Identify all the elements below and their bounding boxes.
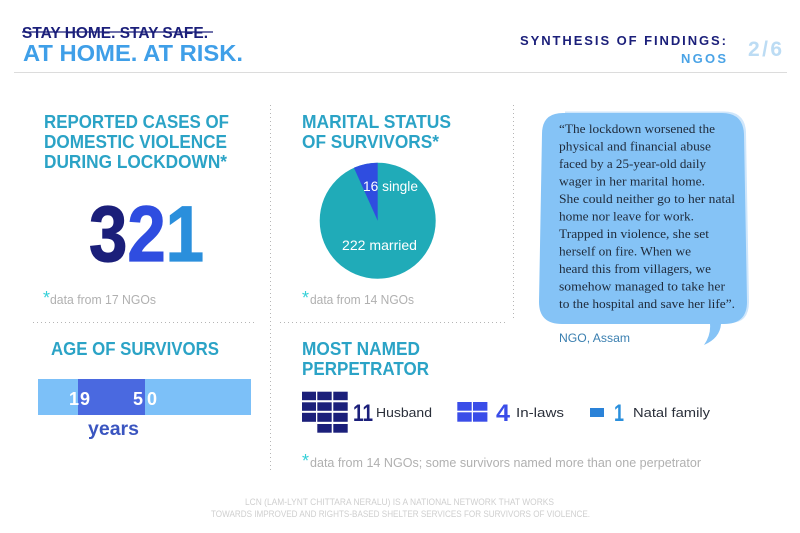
quote text: She could neither go to her natal <box>559 191 735 206</box>
footnote <box>43 288 156 308</box>
age range bar: 19 <box>69 389 90 409</box>
age range bar <box>38 379 251 415</box>
icon: natal family block <box>590 408 604 417</box>
speech bubble <box>539 112 749 345</box>
heading: reported cases <box>44 111 229 172</box>
panel: reported cases <box>43 111 229 308</box>
title: STAY HOME. STAY SAFE. <box>22 25 208 42</box>
footnote: data from 17 NGOs <box>50 292 156 307</box>
quote attribution: NGO, Assam <box>559 331 630 345</box>
panel: age of survivors <box>38 338 251 440</box>
header: synthesis of findings: SYNTHESIS OF FINDINGS: <box>520 33 726 48</box>
stat: 4 in-laws: 4 <box>496 400 511 427</box>
quote text: somehow managed to take her <box>559 278 726 294</box>
footer text: TOWARDS IMPROVED AND RIGHTS-BASED SHELTER SERVICES FOR SURVIVORS OF VIOLENCE. <box>211 509 590 519</box>
heading: most named perpetrator: PERPETRATOR <box>302 358 429 379</box>
footnote: * <box>302 451 309 471</box>
stat: 4 in-laws: In-laws <box>516 405 565 420</box>
quote text: to the hospital and save her life”. <box>559 296 735 311</box>
quote text: heard this from villagers, we <box>559 261 711 276</box>
pie chart: 222 married <box>342 237 417 253</box>
footnote: * <box>302 288 309 308</box>
panel: quote bubble <box>539 112 749 345</box>
heading: most named perpetrator <box>302 338 429 379</box>
quote text: physical and financial abuse <box>559 138 711 154</box>
footnote: data from 14 NGOs <box>310 292 414 307</box>
heading: reported cases: REPORTED CASES OF <box>44 111 229 132</box>
stat: 1 natal family: 1 <box>614 400 624 427</box>
heading: marital status: MARITAL STATUS <box>302 111 451 132</box>
header: synthesis of findings <box>520 33 726 66</box>
pie chart: 16 single <box>363 178 418 194</box>
icon: husband grid <box>302 392 348 433</box>
title: AT HOME. AT RISK. <box>23 40 243 66</box>
quote text: herself on fire. When we <box>559 244 691 258</box>
stat: 4 in-laws <box>496 400 565 427</box>
title <box>22 25 243 66</box>
footnote: * <box>43 288 50 308</box>
heading: marital status: OF SURVIVORS* <box>302 131 440 152</box>
panel: marital status <box>302 111 451 308</box>
stat: 1 natal family: Natal family <box>633 405 711 420</box>
stat: 11 husband <box>353 400 432 427</box>
quote text: “The lockdown worsened the <box>559 121 715 136</box>
quote text <box>559 121 735 311</box>
heading: reported cases: DOMESTIC VIOLENCE <box>44 131 227 152</box>
icon: in-laws grid <box>457 402 487 422</box>
pie chart <box>320 163 436 279</box>
quote text: Trapped in violence, she set <box>559 226 709 241</box>
header: synthesis of findings: NGOS <box>681 51 726 66</box>
footer text: LCN (LAM-LYNT CHITTARA NERALU) IS A NATIONAL NETWORK THAT WORKS <box>245 497 554 507</box>
quote text: faced by a 25-year-old daily <box>559 156 706 171</box>
stat: 11 husband: Husband <box>376 405 432 420</box>
bar label: years: years <box>88 419 139 440</box>
heading: reported cases: DURING LOCKDOWN* <box>44 151 228 172</box>
stat: 11 husband: 11 <box>353 400 373 427</box>
panel: most named perpetrator <box>302 338 711 471</box>
stat: 1 natal family <box>614 400 711 427</box>
footer text <box>211 497 590 519</box>
heading: age of survivors: AGE OF SURVIVORS <box>51 338 219 359</box>
footnote <box>302 288 414 308</box>
footnote: data from 14 NGOs; some survivors named more than one perpetrator <box>310 455 702 470</box>
heading: marital status <box>302 111 451 152</box>
age range bar: 50 <box>133 389 157 409</box>
heading: most named perpetrator: MOST NAMED <box>302 338 420 359</box>
quote text: home nor leave for work. <box>559 208 694 224</box>
big number 321: 321 <box>89 189 204 278</box>
quote text: wager in her marital home. <box>559 174 705 188</box>
page number: 2/6 <box>748 38 782 61</box>
